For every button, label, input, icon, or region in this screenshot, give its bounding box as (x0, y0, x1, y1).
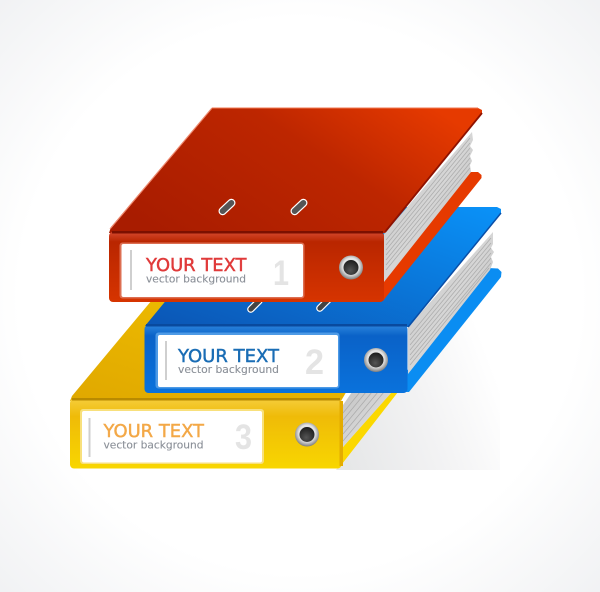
yellow heading: YOUR TEXT (103, 421, 205, 442)
yellow ring (295, 422, 319, 446)
red ring (339, 256, 363, 280)
blue heading: YOUR TEXT (177, 346, 280, 367)
red subheading: vector background (146, 274, 246, 286)
number 3: 3 (235, 418, 252, 457)
yellow subheading: vector background (104, 440, 204, 452)
yellow label (80, 409, 264, 464)
blue clip right (316, 296, 332, 312)
number 2: 2 (305, 343, 324, 382)
red label (120, 242, 304, 298)
red top cover (109, 108, 482, 233)
yellow top cover (70, 300, 400, 401)
blue spine (144, 325, 408, 393)
blue subheading: vector background (178, 364, 279, 376)
yellow divider (88, 418, 90, 457)
number 1: 1 (273, 254, 289, 293)
blue divider (165, 341, 167, 380)
binder 1: red (109, 108, 482, 302)
blue clip left (247, 297, 263, 313)
binder 3: yellow (70, 300, 400, 468)
cast shadow (336, 285, 500, 470)
red heading: YOUR TEXT (145, 255, 247, 276)
yellow back cover (338, 392, 398, 468)
red clip left (218, 198, 236, 216)
blue pages (408, 232, 494, 374)
binder 2: blue (144, 207, 502, 393)
red spine (109, 232, 384, 302)
blue label (156, 332, 340, 388)
blue back cover (406, 268, 502, 392)
blue ring (364, 348, 388, 372)
red divider (130, 250, 132, 290)
red pages (384, 132, 473, 282)
red clip right (290, 198, 308, 216)
yellow pages (343, 392, 392, 447)
yellow spine (70, 399, 342, 468)
red back cover (383, 172, 482, 301)
blue top cover (145, 207, 501, 327)
